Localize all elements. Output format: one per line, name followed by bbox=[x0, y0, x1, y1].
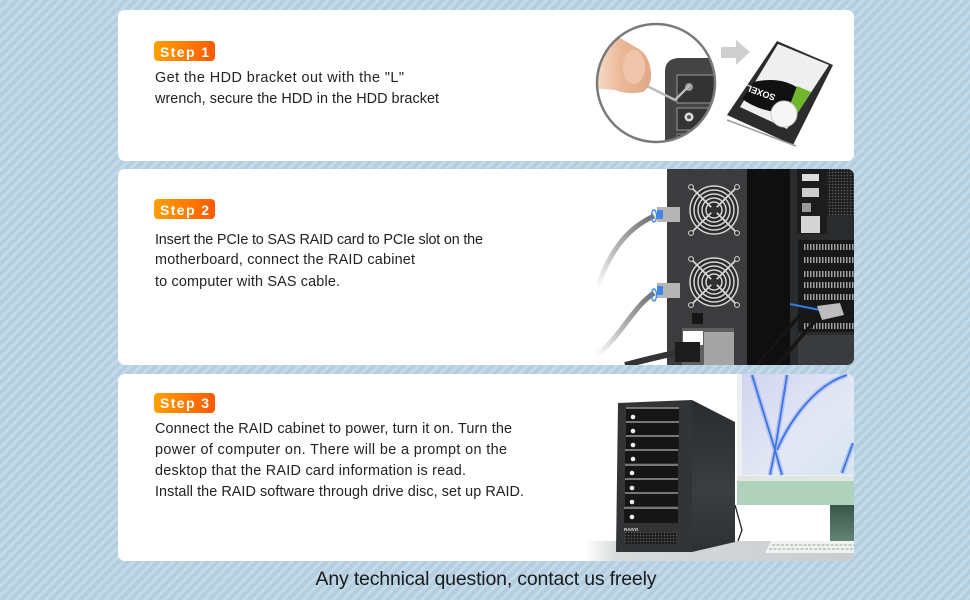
monitor bbox=[737, 374, 854, 542]
keyboard bbox=[765, 541, 854, 553]
step 2 text bbox=[155, 232, 483, 290]
step 3 text: power of computer on. There will be a prompt on the bbox=[155, 442, 507, 458]
icon: hard drive in bracket: SOXEL bbox=[744, 83, 777, 103]
step 3 text: desktop that the RAID card information is read. bbox=[155, 463, 466, 479]
step 2 text: to computer with SAS cable. bbox=[155, 274, 340, 290]
step 3 text: Install the RAID software through drive disc, set up RAID. bbox=[155, 484, 524, 500]
step 1 badge: Step 1 bbox=[160, 44, 209, 60]
panel: step 1 bbox=[118, 10, 854, 161]
panel: step 2 bbox=[118, 169, 854, 365]
step 1 text: wrench, secure the HDD in the HDD bracket bbox=[154, 91, 439, 107]
panel: step 3 bbox=[118, 374, 854, 561]
step 2 badge bbox=[154, 199, 215, 219]
computer rear panel bbox=[790, 169, 854, 365]
connectors bbox=[652, 207, 844, 362]
RAID cabinet bbox=[616, 400, 735, 552]
illustration: RAID cabinet with desktop computer bbox=[585, 374, 854, 561]
step 1 text: Get the HDD bracket out with the "L" bbox=[155, 70, 404, 86]
RAID cabinet: RAIVO bbox=[624, 527, 639, 532]
step 3 text: Connect the RAID cabinet to power, turn it on. Turn the bbox=[155, 421, 512, 437]
footer caption: Any technical question, contact us freely bbox=[316, 568, 657, 590]
step 2 text: Insert the PCIe to SAS RAID card to PCIe slot on the bbox=[155, 232, 483, 248]
cabinet back with fans bbox=[667, 169, 747, 365]
step 3 badge bbox=[154, 393, 215, 413]
SAS cables bbox=[597, 216, 820, 365]
icon: hard drive in bracket bbox=[727, 41, 833, 146]
power cord bbox=[735, 505, 742, 541]
step 3 badge: Step 3 bbox=[160, 395, 209, 411]
arrow bbox=[721, 40, 750, 65]
step 1 badge bbox=[154, 41, 215, 61]
icon: hand using L wrench in circle bbox=[590, 24, 718, 142]
step 1 text bbox=[154, 70, 439, 107]
illustration: RAID cabinet rear connected to computer bbox=[597, 169, 854, 365]
step 2 badge: Step 2 bbox=[160, 202, 209, 218]
step 2 text: motherboard, connect the RAID cabinet bbox=[155, 252, 415, 268]
desk bbox=[585, 541, 854, 561]
step 3 text bbox=[155, 421, 524, 500]
